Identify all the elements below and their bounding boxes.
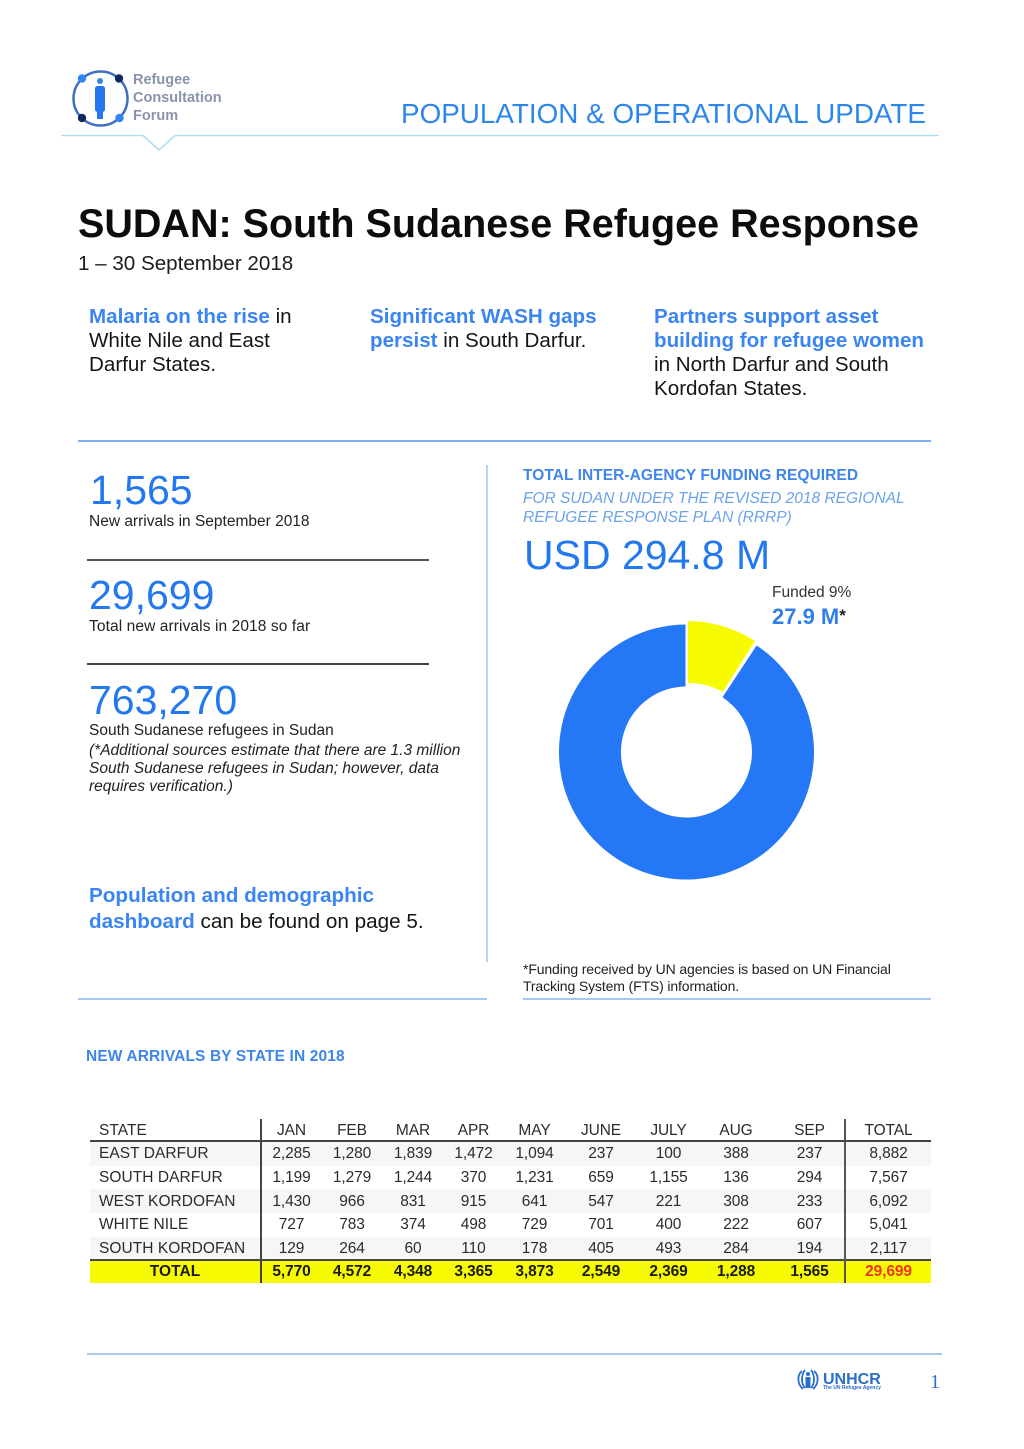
table: new arrivals by state: 1,280 [333, 1145, 371, 1162]
table: new arrivals by state: 100 [656, 1145, 681, 1162]
header logo: Refugee Consultation Forum: Consultation [133, 90, 222, 106]
title: SUDAN: South Sudanese Refugee Response [78, 202, 919, 246]
highlight: asset building: building for refugee women [654, 329, 924, 352]
table: new arrivals by state: 129 [279, 1240, 304, 1257]
stat: South Sudanese refugees in Sudan [89, 677, 460, 795]
table: new arrivals by state: 659 [588, 1169, 614, 1186]
highlight: asset building: in North Darfur and South [654, 353, 889, 376]
table: new arrivals by state: 194 [797, 1240, 822, 1257]
funding subheading: FOR SUDAN UNDER THE REVISED 2018 REGIONAL [523, 490, 905, 507]
dashboard note [89, 884, 424, 933]
header logo: Refugee Consultation Forum [72, 70, 222, 127]
report type heading: POPULATION & OPERATIONAL UPDATE [401, 98, 926, 129]
stat: South Sudanese refugees in Sudan: South Sudanese refugees in Sudan; however, data [89, 760, 439, 777]
header rule with notch [61, 134, 939, 151]
stat: new arrivals in September: 1,565 [90, 467, 193, 513]
table: new arrivals by state: 1,839 [394, 1145, 432, 1162]
dashboard note: Population and demographic [89, 884, 374, 907]
dashboard note: dashboard can be found on page 5. [89, 910, 424, 933]
table: new arrivals by state: 370 [461, 1169, 486, 1186]
highlight: asset building: Kordofan States. [654, 377, 807, 400]
table: new arrivals by state: 1,199 [272, 1169, 311, 1186]
table: new arrivals by state: 2,369 [649, 1263, 688, 1280]
table: new arrivals by state: 136 [723, 1169, 749, 1186]
table: new arrivals by state: 233 [797, 1193, 822, 1210]
highlight: malaria: Malaria on the rise in [89, 305, 292, 328]
stat: new arrivals in September: New arrivals in September 2018 [89, 513, 310, 530]
table: new arrivals by state: 221 [656, 1193, 681, 1210]
funded label: Funded 9% [772, 584, 851, 601]
header logo: Refugee Consultation Forum: Forum [133, 108, 178, 124]
stat: South Sudanese refugees in Sudan: (*Additional sources estimate that there are 1.3 million [89, 742, 460, 759]
table: new arrivals by state: EAST DARFUR [99, 1145, 209, 1162]
table: new arrivals by state: SOUTH KORDOFAN [99, 1240, 245, 1257]
table: new arrivals by state: 5,770 [272, 1263, 311, 1280]
table: new arrivals by state: 374 [400, 1216, 426, 1233]
UNHCR logo [798, 1370, 881, 1391]
table: new arrivals by state: AUG [719, 1122, 753, 1139]
table: new arrivals by state: SOUTH DARFUR [99, 1169, 223, 1186]
highlight: asset building [654, 305, 924, 400]
highlight: WASH gaps: persist in South Darfur. [370, 329, 586, 352]
table: new arrivals by state: MAR [396, 1122, 430, 1139]
table: new arrivals by state: JAN [277, 1122, 306, 1139]
funding subheading: REFUGEE RESPONSE PLAN (RRRP) [523, 509, 792, 526]
table: new arrivals by state: 915 [461, 1193, 486, 1210]
funding footnote: *Funding received by UN agencies is based on UN Financial [523, 961, 891, 977]
stat: total new arrivals in 2018 [89, 572, 310, 635]
table: new arrivals by state: 727 [279, 1216, 304, 1233]
table: new arrivals by state: TOTAL [150, 1263, 200, 1280]
table: new arrivals by state: APR [458, 1122, 489, 1139]
table: new arrivals by state: 831 [400, 1193, 426, 1210]
table: new arrivals by state: 3,365 [454, 1263, 493, 1280]
table: new arrivals by state: WEST KORDOFAN [99, 1193, 235, 1210]
segment: funded [688, 621, 755, 692]
table: new arrivals by state: WHITE NILE [99, 1216, 188, 1233]
funded label [772, 584, 851, 629]
table: new arrivals by state: JUNE [581, 1122, 621, 1139]
table: new arrivals by state: 388 [723, 1145, 749, 1162]
stat: South Sudanese refugees in Sudan: South Sudanese refugees in Sudan [89, 722, 334, 739]
stat: South Sudanese refugees in Sudan: 763,270 [89, 677, 237, 723]
table: new arrivals by state: 7,567 [869, 1169, 908, 1186]
table: new arrivals by state: TOTAL [864, 1122, 913, 1139]
table: new arrivals by state: 547 [588, 1193, 614, 1210]
table: new arrivals by state: 284 [723, 1240, 749, 1257]
table: new arrivals by state: 405 [588, 1240, 614, 1257]
table: new arrivals by state: 783 [339, 1216, 365, 1233]
table: new arrivals by state: FEB [337, 1122, 367, 1139]
funding footnote [523, 961, 891, 994]
table: new arrivals by state: 8,882 [869, 1145, 908, 1162]
funding heading: TOTAL INTER-AGENCY FUNDING REQUIRED [523, 467, 858, 484]
table: new arrivals by state: 641 [522, 1193, 547, 1210]
table: new arrivals by state: SEP [794, 1122, 825, 1139]
donut chart: funded vs unfunded [559, 621, 814, 880]
table: new arrivals by state: 5,041 [869, 1216, 908, 1233]
table: new arrivals by state: 1,279 [333, 1169, 371, 1186]
stat: total new arrivals in 2018: Total new arrivals in 2018 so far [89, 618, 310, 635]
funding footnote: Tracking System (FTS) information. [523, 978, 739, 994]
table: new arrivals by state: 607 [797, 1216, 822, 1233]
table: new arrivals by state: 308 [723, 1193, 749, 1210]
table: new arrivals by state: 3,873 [515, 1263, 554, 1280]
table: new arrivals by state: 60 [404, 1240, 422, 1257]
table: new arrivals by state: 701 [588, 1216, 614, 1233]
highlight: asset building: Partners support asset [654, 305, 878, 328]
table: new arrivals by state: 2,285 [272, 1145, 311, 1162]
table: new arrivals by state: 966 [339, 1193, 365, 1210]
table: new arrivals by state: 400 [656, 1216, 681, 1233]
table: new arrivals by state: 1,094 [515, 1145, 554, 1162]
table: new arrivals by state: 729 [522, 1216, 547, 1233]
table: new arrivals by state: 6,092 [869, 1193, 908, 1210]
table: new arrivals by state: STATE [99, 1122, 147, 1139]
table: new arrivals by state: 2,117 [870, 1240, 907, 1257]
UNHCR logo: UNHCR [823, 1371, 881, 1388]
funded label: 27.9 M* [772, 604, 846, 629]
page number: 1 [930, 1371, 940, 1393]
funding required amount: USD 294.8 M [524, 532, 770, 578]
table: new arrivals by state: 4,348 [394, 1263, 432, 1280]
segment: unfunded [559, 624, 814, 879]
highlight: WASH gaps [370, 305, 597, 352]
table: new arrivals by state: 1,472 [454, 1145, 493, 1162]
stat: total new arrivals in 2018: 29,699 [89, 572, 214, 618]
table: new arrivals by state: 1,288 [717, 1263, 755, 1280]
UNHCR logo: The UN Refugee Agency [823, 1385, 881, 1391]
table: new arrivals by state: 264 [339, 1240, 365, 1257]
table: new arrivals by state: 1,565 [790, 1263, 829, 1280]
table: new arrivals by state [90, 1119, 931, 1283]
table: new arrivals by state: 2,549 [582, 1263, 620, 1280]
highlight: WASH gaps: Significant WASH gaps [370, 305, 597, 328]
header logo: Refugee Consultation Forum: Refugee [133, 72, 190, 88]
table: new arrivals by state: 178 [522, 1240, 547, 1257]
date range: 1 – 30 September 2018 [78, 252, 293, 275]
table: new arrivals by state: 237 [797, 1145, 822, 1162]
table: new arrivals by state: 294 [797, 1169, 822, 1186]
table: new arrivals by state: 1,155 [649, 1169, 688, 1186]
table: new arrivals by state: JULY [650, 1122, 687, 1139]
table: new arrivals by state: 4,572 [333, 1263, 371, 1280]
table: new arrivals by state: 237 [588, 1145, 614, 1162]
table: new arrivals by state: 110 [461, 1240, 486, 1257]
table: new arrivals by state: 1,430 [272, 1193, 311, 1210]
highlight: malaria: White Nile and East [89, 329, 270, 352]
table: new arrivals by state: 1,244 [394, 1169, 432, 1186]
highlight: malaria [89, 305, 292, 376]
table: new arrivals by state: 498 [461, 1216, 486, 1233]
stat: South Sudanese refugees in Sudan: requires verification.) [89, 778, 233, 795]
table: new arrivals by state: MAY [518, 1122, 551, 1139]
highlight: malaria: Darfur States. [89, 353, 216, 376]
table: new arrivals by state: 1,231 [515, 1169, 554, 1186]
table: new arrivals by state: 222 [723, 1216, 749, 1233]
table heading: NEW ARRIVALS BY STATE IN 2018 [86, 1048, 345, 1065]
table: new arrivals by state: 29,699 [865, 1263, 912, 1280]
stat: new arrivals in September [89, 467, 310, 530]
table: new arrivals by state: 493 [656, 1240, 681, 1257]
funding subheading [523, 490, 905, 526]
